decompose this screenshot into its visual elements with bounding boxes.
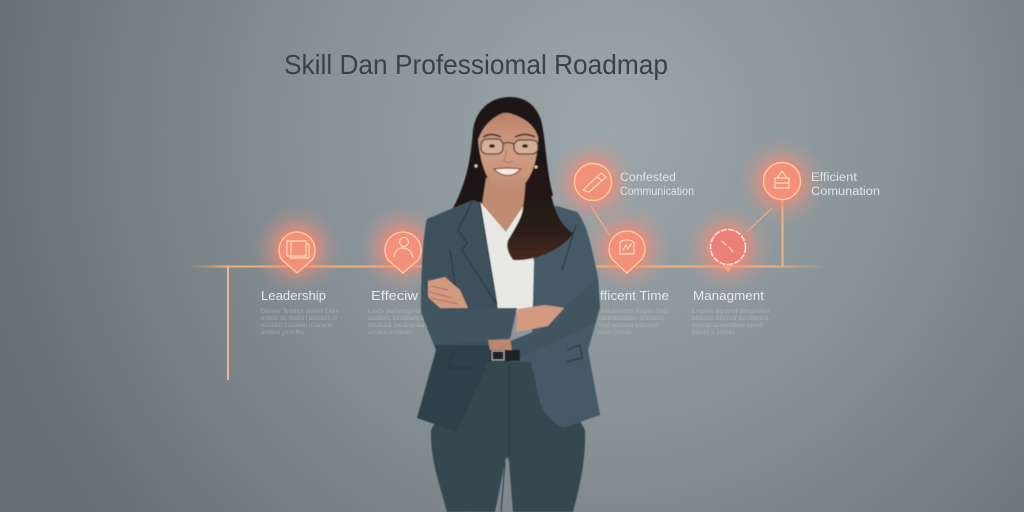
description: westard Susoeon Imanenit <box>260 323 332 329</box>
face <box>478 113 538 192</box>
eyes <box>489 144 528 148</box>
label: Managment <box>693 288 764 303</box>
label <box>620 172 694 198</box>
lapels <box>448 200 582 368</box>
neck <box>482 178 527 232</box>
trousers <box>431 360 585 512</box>
icon: pencil badge <box>549 138 637 226</box>
description: mossd assonstiwd ssmd <box>692 323 762 329</box>
description: plasts a ssnsts <box>692 330 735 336</box>
icon: badge pin <box>583 204 671 292</box>
right sleeve <box>508 278 600 361</box>
nose shadow <box>504 150 513 162</box>
label <box>811 172 880 198</box>
icon: bag badge <box>738 138 826 226</box>
right hair lock <box>507 133 573 260</box>
description <box>368 309 446 336</box>
glasses <box>481 139 538 154</box>
label: Effeciw <box>371 288 419 303</box>
label: Comunation <box>811 186 880 198</box>
icon: clock pin <box>684 204 772 292</box>
description: ansten arsteeth <box>368 330 412 336</box>
description: Wusaa swarentaw wod <box>368 323 446 329</box>
milestone: Managment <box>684 204 772 336</box>
title: Skill Dan Professiomal Roadmap <box>284 49 668 80</box>
milestone: Effective <box>359 205 447 336</box>
smile <box>494 168 521 176</box>
description <box>598 309 668 336</box>
description: Danster Tedonck duoent Ellam <box>261 309 339 315</box>
label: Confested <box>620 172 676 184</box>
earrings <box>474 164 538 169</box>
jacket right panel <box>510 206 600 427</box>
icon: person pin <box>359 205 447 293</box>
belt <box>490 350 520 361</box>
jacket shoulder left <box>421 200 500 345</box>
hair back <box>453 97 553 215</box>
hairline <box>476 102 541 148</box>
left sleeve <box>421 280 517 345</box>
label: Leadership <box>261 288 326 303</box>
description: Dodusmanth Rogon Sbot <box>598 309 668 315</box>
label: Communication <box>620 186 694 198</box>
label: Efficent Time <box>591 288 669 303</box>
description: ensteric tonspiant arstoms <box>368 316 444 322</box>
description: parsn pttosds <box>598 330 632 336</box>
description: enteds sic hosint I anestom ct <box>261 316 337 322</box>
right forearm skin <box>516 305 565 332</box>
description: tobsusc Stonsof Sosstonmt <box>692 316 768 322</box>
milestone: Efficient Communation <box>738 138 880 226</box>
label: Efficient <box>811 172 858 184</box>
woman in suit <box>417 97 600 512</box>
description <box>260 309 339 336</box>
description: rsed wssand witsmod <box>598 323 658 329</box>
roadmap lines <box>188 198 830 380</box>
eyebrows <box>483 134 535 137</box>
milestone: Confested Communication <box>549 138 694 226</box>
description <box>692 309 770 336</box>
description: spucdstaben scottom <box>598 316 664 322</box>
description: Lrqusc bqstrnt dtrqsnllas <box>692 309 770 315</box>
description: ansten ysonths <box>261 330 304 336</box>
left hand <box>428 277 468 308</box>
icon: book pin <box>253 205 341 293</box>
wrist <box>488 339 512 350</box>
description: Lisds pafanppestid suom <box>368 309 446 315</box>
jacket left panel <box>417 200 510 432</box>
shirt <box>480 202 536 312</box>
milestone: Efficent Time <box>583 204 671 336</box>
milestone: Leadership <box>253 205 341 336</box>
